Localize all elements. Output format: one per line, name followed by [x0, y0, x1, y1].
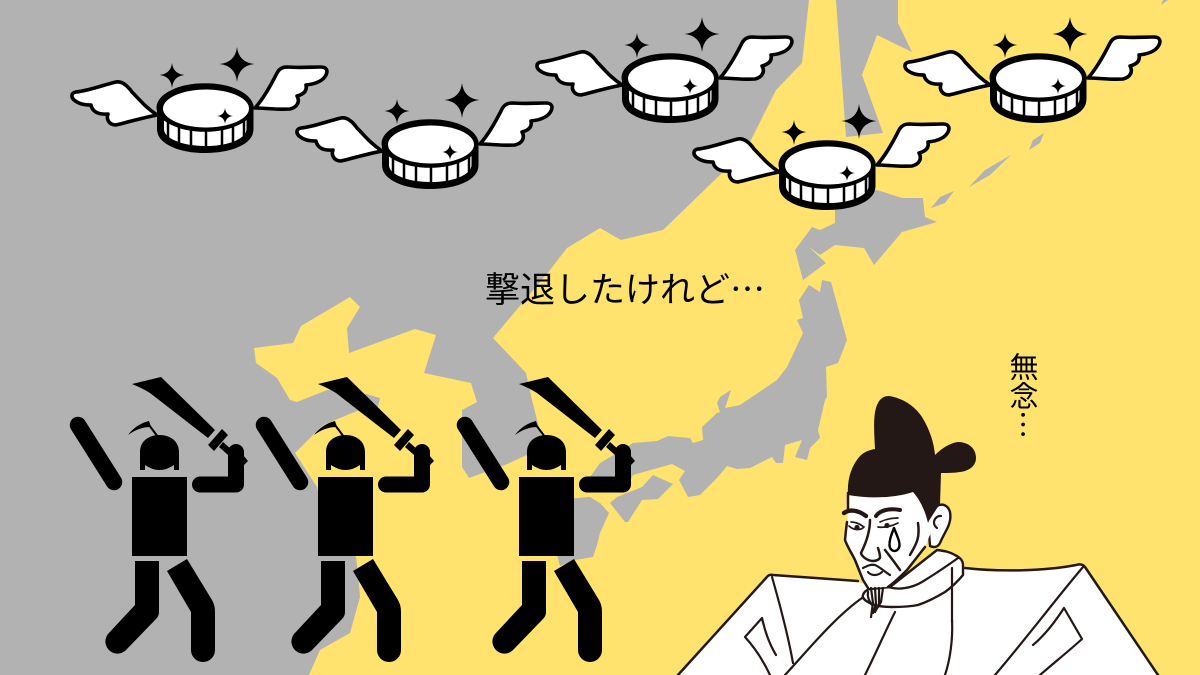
flying coin 3 — [537, 17, 792, 120]
flying coin 2 — [297, 83, 552, 186]
facial features — [844, 509, 919, 575]
heading text: 撃退したけれど… — [485, 262, 765, 313]
map: Hokkaido — [795, 190, 937, 280]
soldier 2 — [264, 377, 434, 662]
map: Sakhalin — [836, 0, 912, 137]
map: Asian mainland and Korean peninsula — [0, 0, 809, 675]
map: Shikoku — [610, 475, 673, 522]
map: Kyushu — [550, 497, 609, 566]
flying coin 1 — [72, 47, 327, 150]
beard — [868, 588, 883, 617]
map: Kuril islands — [931, 0, 1168, 208]
soldier 1 — [78, 377, 248, 662]
vertical speech text: 無念… — [1003, 352, 1045, 439]
hat — [848, 396, 976, 523]
collar — [863, 550, 963, 607]
flying coin 5 — [905, 17, 1160, 120]
flying coin 4 — [694, 104, 949, 207]
face — [845, 492, 932, 588]
ear — [928, 505, 950, 547]
robe — [678, 564, 1158, 675]
map: Honshu — [590, 280, 847, 497]
soldier 3 — [465, 377, 635, 662]
samurai lord portrait with tear — [678, 396, 1158, 675]
